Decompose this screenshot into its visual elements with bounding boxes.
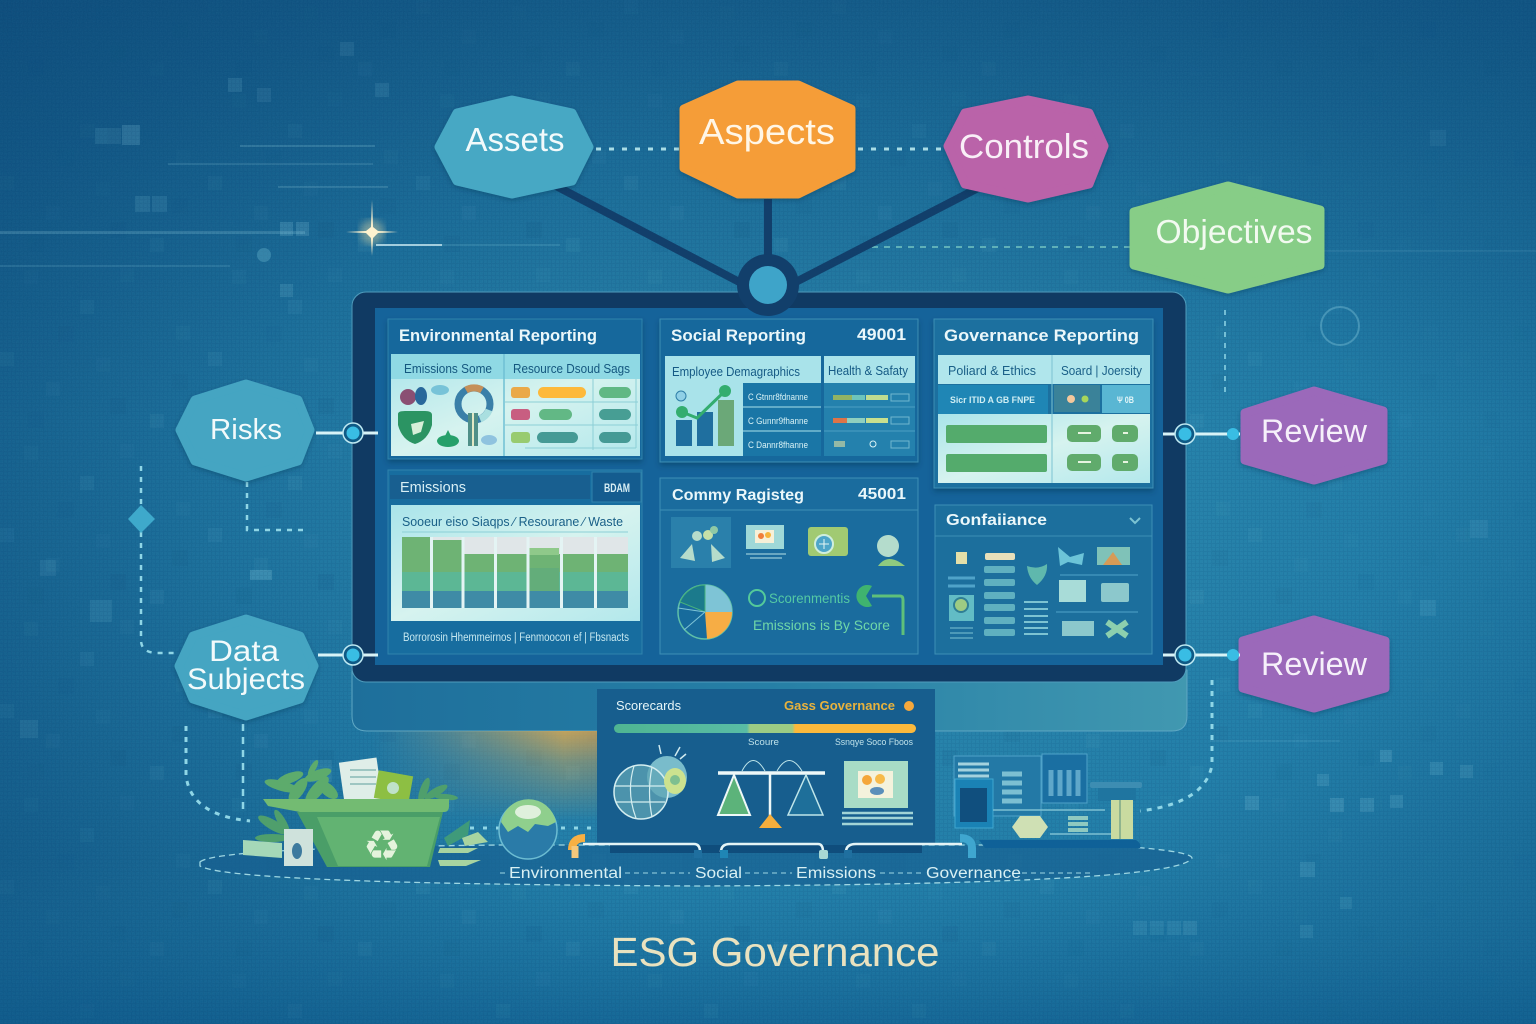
illustration: earth globe [499,799,557,859]
status row: Sicr ITID A GB FNPE [950,395,1035,406]
light card: Emissions Some [404,362,492,376]
pipeline label row: Governance [926,865,1021,882]
icon: report card [842,761,913,824]
hexagon: Risks: Risks [210,414,282,446]
hexagon: Data Subjects [179,619,314,716]
score text: Emissions is By Score [753,618,890,633]
hexagon: Assets [439,100,589,194]
heading: Gonfaiiance [946,512,1047,529]
small labels: Ssnqye Soco Fboos [835,737,913,748]
hexagon: Review upper [1245,391,1383,480]
dotted connector: hexagons [596,149,1130,247]
resource bars [505,379,638,450]
hexagon: Risks [180,384,310,477]
heading: Governance Reporting [944,327,1139,345]
number 45001: 45001 [858,486,906,503]
hexagon: Controls: Controls [959,128,1089,166]
icon: globe [614,745,687,819]
hexagon: Aspects: Aspects [699,111,835,152]
hub spokes [556,186,982,285]
orange glow [388,731,597,815]
pipeline label row [500,865,1090,882]
green bars [938,414,1150,483]
score bar [614,724,916,733]
compliance icons [948,547,1138,638]
side connector nodes [316,423,1240,665]
status row: Ψ 0B [1117,395,1134,405]
Emissions header [390,472,641,502]
panel: Scorecards [597,689,935,853]
hub node [737,254,799,316]
hexagon: Data Subjects: Data [209,635,279,668]
icon: arrow gauge [856,585,903,635]
small labels: Scoure [748,737,779,748]
pipeline label row: Social [695,865,742,882]
panel: Emissions [388,470,642,654]
heading: Social Reporting: Social Reporting [671,327,806,345]
dashed connectors: sides [141,310,1225,828]
light card [391,354,640,456]
panel: Community Register [660,478,918,654]
hexagon: Objectives [1134,186,1320,289]
hexagon: Review lower: Review [1261,646,1368,682]
icon: chevron [1130,518,1140,523]
Emissions chart card [391,505,640,621]
pipeline connectors [572,838,972,859]
Emissions header: BDAM [604,481,630,495]
hexagon: Review upper: Review [1261,413,1368,449]
heading: Environmental Reporting: Environmental Reporting [399,327,597,345]
hexagon: Data Subjects: Subjects [187,663,305,696]
small labels [748,737,913,748]
panel: Social Reporting [660,319,918,462]
tab: Employee Demographics: Employee Demagraphics [672,364,800,379]
tab: Employee Demographics: Health & Safaty [828,364,909,378]
monitor stand [352,670,1187,731]
tabs: Poliard & Ethics [948,364,1036,378]
Emissions header: Emissions [400,480,466,496]
hexagon: Assets: Assets [466,121,564,158]
hexagon: Review lower [1243,620,1385,708]
monitor frame [352,292,1186,682]
health rows [824,383,915,456]
status row [938,385,1150,414]
pie chart [678,585,732,639]
number 49001: 49001 [857,326,906,344]
panel: Compliance [935,505,1152,654]
pipeline label row: Emissions [796,865,876,882]
bar and line chart [676,385,734,446]
icon: diamond marker [128,505,155,533]
tab: Employee Demographics [665,356,915,456]
light card: Resource Dsoud Sags [513,362,630,376]
title: ESG Governance: ESG Governance [610,929,940,975]
platform ellipse [200,845,1192,886]
tabs: Soard | Joersity [1061,364,1143,378]
Emissions footer: Borrorosin Hhemmeirnos | Fenmoocon ef | Fbsnacts [403,632,629,644]
pipeline label row: Environmental [509,865,622,882]
Emissions chart card: Sooeur eiso Siaqps ⁄ Resourane ⁄ Waste [402,515,623,529]
score text: Scorenmentis [769,591,850,606]
illustration: governance buildings [954,754,1142,848]
list rows [743,383,821,456]
stacked bar chart [402,537,628,608]
heading: Scorecards: Scorecards [616,698,681,713]
community icons [671,517,905,568]
hexagon: Objectives: Objectives [1156,213,1312,250]
panel: Environmental Reporting [388,319,642,459]
tabs [938,355,1150,482]
panel: Governance Reporting [934,319,1153,488]
list rows: C Gunnr9fhanne [748,416,808,426]
environmental icons [398,385,497,447]
decorative sparkle [257,200,1359,345]
illustration: recycling bin [243,757,488,869]
list rows: C Dannr8fhanne [748,440,808,450]
list rows: C Gtnnr8fdnanne [748,392,808,402]
heading: Commy Ragisteg [672,487,804,504]
illustration: recycling bin: ♻ [363,822,401,869]
label: Gass Governance: Gass Governance [784,699,895,713]
icon: balance scale [718,760,825,828]
hexagon: Controls [948,100,1104,198]
score text [749,590,890,633]
hexagon: Aspects [684,85,851,194]
